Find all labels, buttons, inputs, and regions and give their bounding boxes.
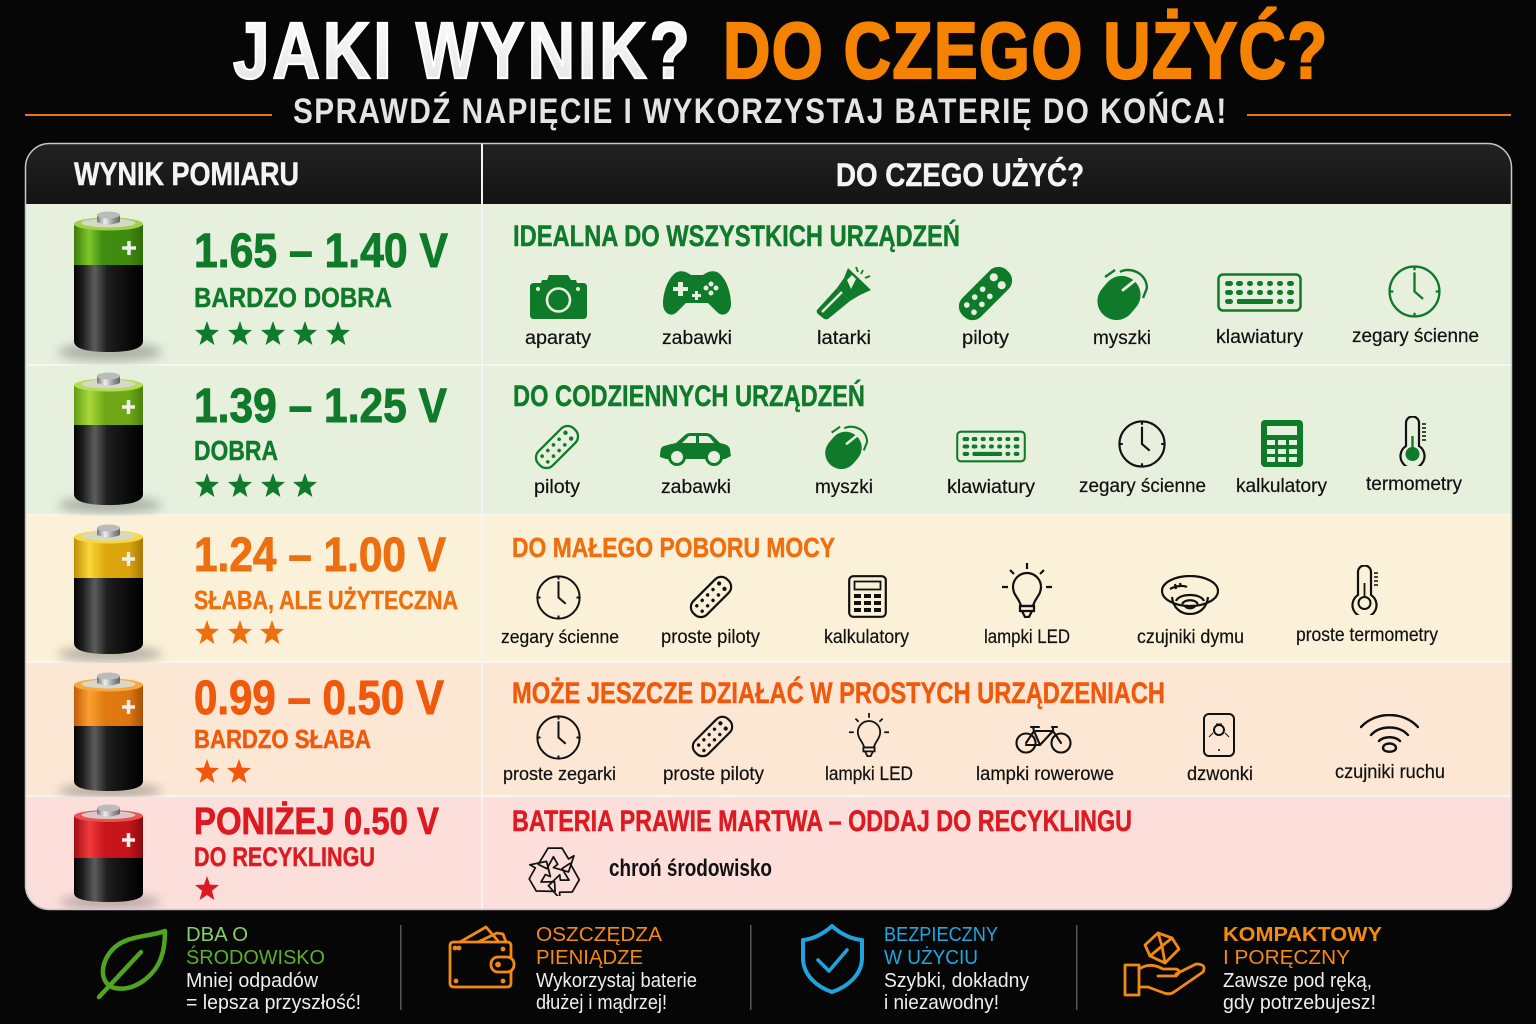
label: proste termometry: proste termometry [1296, 625, 1438, 646]
label: chroń środowisko: chroń środowisko [609, 855, 772, 882]
panel: row 4 [26, 663, 1511, 798]
icon: bulb [849, 713, 889, 756]
rating: BARDZO SŁABA [194, 724, 371, 754]
text: Zawsze pod ręką, [1223, 970, 1372, 992]
heading: KOMPAKTOWY [1223, 924, 1383, 946]
heading [536, 924, 663, 969]
stars [195, 473, 317, 497]
heading [884, 924, 998, 969]
icon: thermometer [1400, 416, 1426, 468]
heading: W UŻYCIU [884, 946, 978, 969]
text [536, 970, 697, 1014]
panel: row 5 [26, 797, 1511, 910]
icon: clock [1119, 421, 1165, 467]
title: JAKI WYNIK? [233, 6, 690, 95]
label: piloty: piloty [534, 477, 581, 498]
rating: SŁABA, ALE UŻYTECZNA [194, 585, 458, 615]
icon: remote [958, 266, 1012, 320]
label: myszki: myszki [1093, 328, 1151, 349]
stars [195, 321, 350, 345]
label: zegary ścienne: zegary ścienne [1079, 476, 1206, 497]
battery: green [58, 212, 162, 361]
text: Mniej odpadów [186, 970, 319, 992]
icon: shield [803, 926, 862, 992]
voltage value: 1.65 – 1.40 V [194, 225, 448, 278]
label: zegary ścienne: zegary ścienne [1352, 326, 1479, 347]
label: czujniki ruchu: czujniki ruchu [1335, 762, 1445, 783]
title: DO CZEGO UŻYĆ? [723, 6, 1327, 95]
icon: hand holding box [1125, 933, 1204, 995]
label: proste piloty: proste piloty [661, 627, 760, 648]
table header: DO CZEGO UŻYĆ? [836, 157, 1084, 193]
text: gdy potrzebujesz! [1223, 992, 1376, 1014]
label: klawiatury: klawiatury [1216, 327, 1304, 348]
icon: bulb [1002, 563, 1052, 617]
text [884, 970, 1029, 1014]
table border [26, 144, 1512, 910]
heading: DBA O [186, 924, 248, 946]
heading: BEZPIECZNY [884, 924, 998, 946]
label: kalkulatory: kalkulatory [824, 627, 909, 648]
benefit: środowisko [99, 924, 361, 1014]
heading: MOŻE JESZCZE DZIAŁAĆ W PROSTYCH URZĄDZENIACH [512, 676, 1165, 710]
benefit: kompaktowy [1125, 924, 1383, 1014]
icon: bicycle [1016, 727, 1070, 752]
icon: remote [534, 424, 580, 470]
voltage value: PONIŻEJ 0.50 V [194, 801, 440, 843]
icon: clock [1390, 267, 1439, 316]
heading: I PORĘCZNY [1223, 947, 1350, 969]
heading: DO CODZIENNYCH URZĄDZEŃ [513, 379, 865, 413]
label: zabawki: zabawki [662, 328, 732, 349]
text [1223, 970, 1376, 1014]
label: latarki: latarki [817, 328, 871, 349]
benefit: bezpieczny [803, 924, 1029, 1014]
text: i niezawodny! [884, 992, 999, 1014]
heading: DO MAŁEGO POBORU MOCY [512, 532, 835, 563]
text [186, 970, 361, 1014]
panel: row 1 [26, 204, 1511, 364]
icon: mouse [825, 426, 868, 469]
subtitle: SPRAWDŹ NAPIĘCIE I WYKORZYSTAJ BATERIĘ DO KOŃCA! [293, 91, 1226, 131]
label: aparaty: aparaty [525, 328, 592, 349]
stars [195, 620, 284, 644]
text: Wykorzystaj baterie [536, 970, 697, 992]
battery: red [60, 804, 160, 909]
label: kalkulatory: kalkulatory [1236, 476, 1327, 497]
heading [186, 924, 325, 969]
panel: row 2 [26, 366, 1511, 514]
label: lampki LED: lampki LED [825, 764, 913, 785]
stars [195, 759, 251, 783]
benefit: pieniądze [450, 924, 697, 1014]
heading [1223, 924, 1383, 969]
rating: DOBRA [194, 435, 278, 466]
icon: remote [689, 713, 736, 760]
icon: keyboard [957, 432, 1025, 461]
heading: ŚRODOWISKO [186, 945, 325, 969]
icon: camera [530, 275, 587, 319]
table header [26, 144, 1511, 204]
label: lampki LED: lampki LED [984, 627, 1070, 648]
label: dzwonki: dzwonki [1187, 764, 1253, 785]
label: myszki: myszki [815, 477, 873, 498]
voltage value: 1.39 – 1.25 V [194, 380, 447, 433]
icon: car [660, 433, 731, 464]
icon: mouse [1097, 268, 1148, 320]
battery: yellow [58, 524, 162, 662]
text: = lepsza przyszłość! [186, 992, 361, 1014]
icon: motion sensor [1361, 715, 1418, 752]
voltage value: 1.24 – 1.00 V [194, 529, 446, 582]
heading: BATERIA PRAWIE MARTWA – ODDAJ DO RECYKLINGU [512, 805, 1132, 838]
panel: table [26, 144, 1512, 910]
icon: recycle [523, 848, 584, 902]
label: klawiatury: klawiatury [947, 477, 1036, 498]
text: dłużej i mądrzej! [536, 992, 667, 1014]
label: proste zegarki: proste zegarki [503, 764, 616, 784]
heading: OSZCZĘDZA [536, 924, 663, 946]
rating: BARDZO DOBRA [194, 282, 392, 313]
battery: light green [58, 372, 162, 513]
label: proste piloty: proste piloty [663, 764, 764, 785]
text: Szybki, dokładny [884, 970, 1029, 992]
rating: DO RECYKLINGU [194, 842, 375, 872]
icon: remote [687, 573, 735, 621]
heading: PIENIĄDZE [536, 947, 643, 969]
label: termometry: termometry [1366, 474, 1462, 495]
title [233, 6, 1327, 95]
icon: clock [537, 576, 580, 619]
heading: IDEALNA DO WSZYSTKICH URZĄDZEŃ [513, 219, 960, 253]
panel: footer benefits [99, 924, 1383, 1014]
icon: calculator [849, 576, 886, 617]
battery: orange [58, 672, 162, 798]
label: lampki rowerowe: lampki rowerowe [976, 764, 1114, 785]
icon: thermometer [1352, 566, 1378, 617]
icon: flashlight [817, 267, 871, 319]
icon: clock [537, 716, 580, 759]
icon: wallet [450, 927, 514, 987]
voltage value: 0.99 – 0.50 V [194, 672, 444, 725]
label: zegary ścienne: zegary ścienne [501, 627, 619, 647]
table header: WYNIK POMIARU [74, 156, 299, 192]
star [195, 876, 219, 900]
icon: leaf [99, 931, 165, 997]
icon: doorbell [1204, 714, 1234, 756]
column divider [481, 144, 483, 910]
icon: smoke detector [1162, 576, 1218, 614]
label: czujniki dymu: czujniki dymu [1137, 627, 1244, 648]
icon: calculator [1261, 420, 1303, 467]
icon: keyboard [1218, 274, 1300, 310]
label: zabawki: zabawki [661, 477, 731, 498]
panel: row 3 [26, 516, 1511, 662]
label: piloty: piloty [962, 328, 1010, 349]
icon: gamepad [663, 271, 731, 315]
